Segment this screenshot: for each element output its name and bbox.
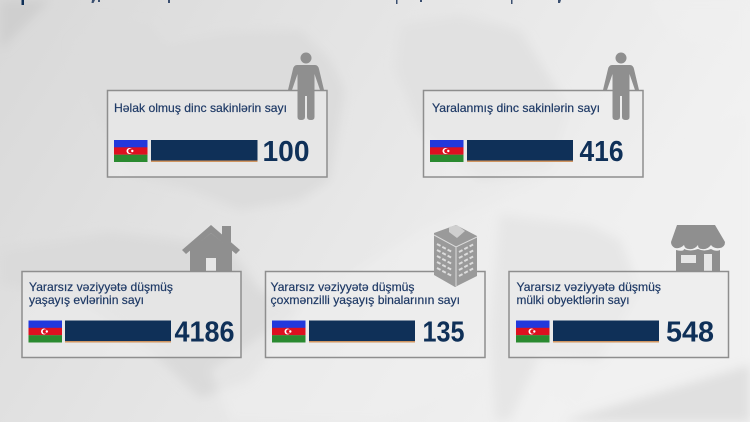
- clipped header remnants: [22, 0, 561, 5]
- label: Yararsız vəziyyətə düşmüş: [29, 280, 173, 294]
- panel frame: [509, 272, 728, 358]
- bar: [65, 320, 171, 342]
- card: civil objects: [509, 225, 728, 358]
- value: 4186: [174, 316, 234, 348]
- label: Yaralanmış dinc sakinlərin sayı: [432, 101, 600, 115]
- flag: [28, 320, 62, 342]
- bar: [309, 320, 415, 342]
- panel frame: [108, 90, 327, 177]
- label: Yararsız vəziyyətə düşmüş: [270, 280, 414, 294]
- value: 100: [262, 136, 310, 168]
- card: killed civilians: [108, 52, 327, 177]
- flag: [272, 320, 306, 342]
- icon: apartment building: [434, 225, 477, 287]
- bar: [553, 320, 659, 342]
- icon: person: [288, 52, 324, 120]
- panel frame: [266, 272, 485, 358]
- bar: [151, 140, 258, 162]
- label: mülki obyektlərin sayı: [516, 293, 630, 307]
- value: 135: [422, 316, 464, 348]
- icon: house: [182, 225, 240, 272]
- label: [29, 280, 173, 307]
- label: Həlak olmuş dinc sakinlərin sayı: [114, 101, 287, 115]
- label: [516, 280, 661, 307]
- value: 416: [580, 136, 624, 168]
- card: houses: [22, 225, 241, 358]
- flag: [516, 320, 550, 342]
- flag: [430, 140, 464, 162]
- value: 548: [666, 316, 714, 348]
- label: [270, 280, 460, 307]
- panel frame: [424, 90, 643, 177]
- label: Yararsız vəziyyətə düşmüş: [516, 280, 661, 294]
- panel frame: [22, 272, 241, 358]
- card: apartment buildings: [266, 225, 485, 358]
- label: yaşayış evlərinin sayı: [29, 293, 144, 307]
- icon: person: [603, 52, 639, 120]
- flag: [114, 140, 148, 162]
- card: wounded civilians: [424, 52, 643, 177]
- label: çoxmənzilli yaşayış binalarının sayı: [270, 293, 460, 307]
- icon: shop: [671, 225, 725, 271]
- bar: [467, 140, 573, 162]
